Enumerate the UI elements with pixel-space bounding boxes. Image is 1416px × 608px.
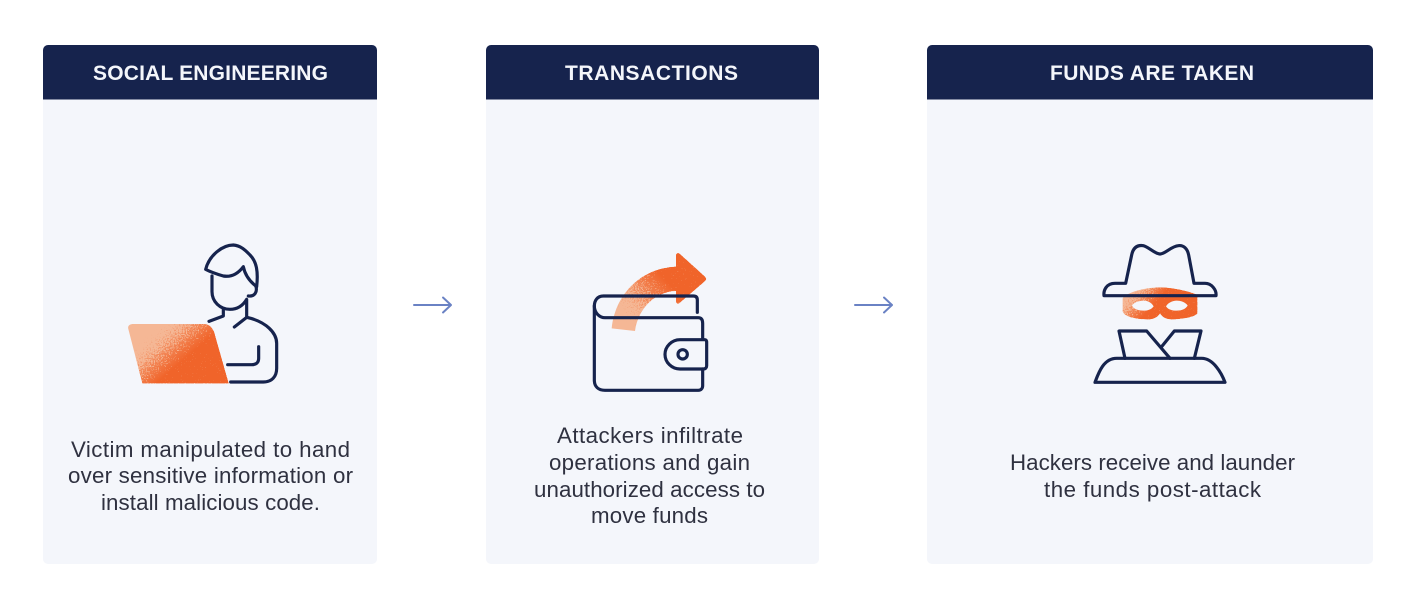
body text: funds are taken [1010, 450, 1296, 502]
panel: social engineering [43, 45, 377, 564]
body text: transactions: unauthorized access to [534, 477, 765, 502]
body text: transactions: move funds [591, 503, 708, 528]
body text: social engineering [68, 437, 354, 515]
body text: funds are taken: the funds post-attack [1044, 477, 1262, 502]
icon: person at laptop [128, 245, 277, 383]
arrow: step one to two [414, 298, 451, 312]
body text: transactions: operations and gain [549, 450, 750, 475]
body text: transactions: Attackers infiltrate [557, 423, 743, 448]
icon: masked hacker [1095, 246, 1225, 382]
arrow: step two to three [855, 298, 892, 312]
icon: wallet with outgoing arrow [594, 253, 707, 390]
heading: social engineering: SOCIAL ENGINEERING [93, 62, 328, 85]
heading: funds are taken: FUNDS ARE TAKEN [1050, 62, 1254, 85]
body text: social engineering: over sensitive information or [68, 463, 354, 488]
panel: funds are taken [927, 45, 1373, 564]
body text: social engineering: install malicious code. [101, 490, 320, 515]
header bar: transactions [486, 45, 819, 100]
body text: transactions [534, 423, 765, 528]
header bar: funds are taken [927, 45, 1373, 100]
header bar: social engineering [43, 45, 377, 100]
body text: funds are taken: Hackers receive and launder [1010, 450, 1296, 475]
panel: transactions [486, 45, 819, 564]
heading: transactions: TRANSACTIONS [565, 62, 738, 85]
body text: social engineering: Victim manipulated to hand [71, 437, 350, 462]
